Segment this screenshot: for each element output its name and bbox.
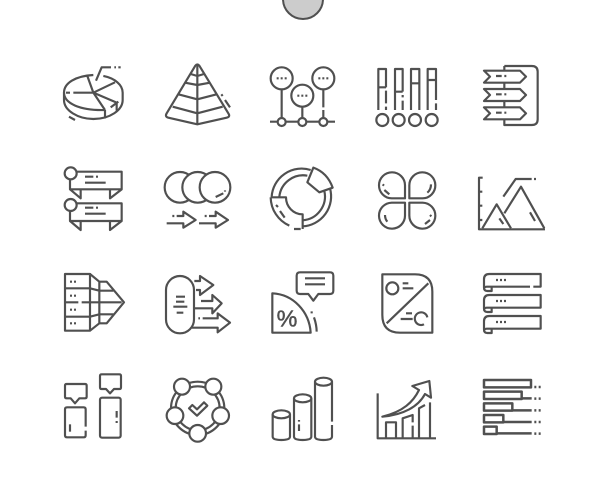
icon: three cylinders: [273, 378, 332, 440]
icon: two ribbon banners: [65, 167, 122, 230]
icon: bars with speech bubbles: [65, 374, 121, 438]
icon: three scroll banners: [484, 274, 541, 333]
icon: segmented donut: [271, 168, 333, 229]
icon: pill with arrows: [166, 276, 230, 333]
icon: overlapping circles and arrows: [165, 172, 230, 228]
icon: growth chart with arrow: [378, 381, 436, 438]
row 1 left icons: [64, 64, 335, 126]
row 1 right icons: [376, 66, 538, 126]
row 4 right icons: [378, 380, 541, 438]
row 4 left icons: [65, 374, 332, 442]
icon: layered pyramid: [166, 64, 230, 124]
icon: arrow flags with bracket: [484, 66, 538, 125]
icon: mountain chart: [479, 178, 545, 229]
icon: horizontal bar chart: [484, 380, 541, 434]
icon: circle network with check: [167, 379, 229, 442]
icon: split diagonal leaf: [382, 274, 432, 333]
row 3 right icons: [382, 274, 541, 333]
icon: server funnel: [65, 274, 124, 331]
row 3 left icons: [65, 272, 333, 333]
icon: four vertical bars with circles: [376, 69, 438, 126]
icon: percent quarter pie with speech bubble: [272, 272, 333, 333]
top circle badge: [283, 0, 323, 19]
icon: 3D pie chart: [64, 67, 123, 120]
icon: four petal clover: [379, 172, 435, 229]
row 2 left icons: [65, 167, 333, 230]
icon: timeline with bubbles: [270, 67, 335, 126]
icon: percent quarter pie with speech bubble: %: [277, 306, 297, 332]
row 2 right icons: [379, 172, 545, 229]
